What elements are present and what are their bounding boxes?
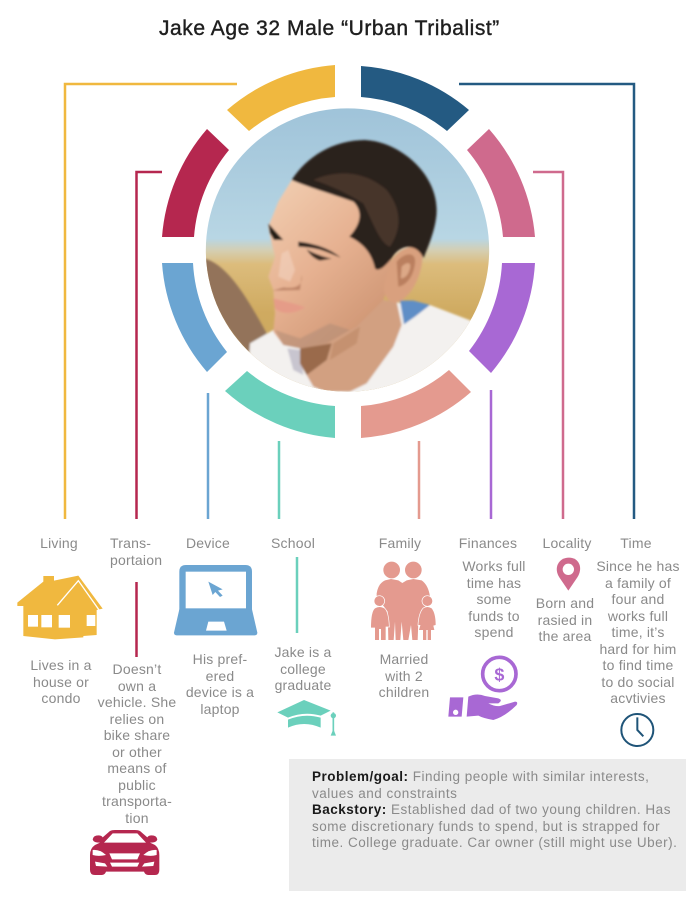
text: device: ered — [206, 668, 234, 684]
text: device: laptop — [200, 700, 240, 716]
text: transportation: tion — [125, 810, 149, 826]
text: time: to find time — [603, 657, 673, 673]
text: locality — [536, 595, 594, 644]
connector: family — [418, 441, 420, 519]
text: family — [379, 651, 429, 700]
text: transportation: own a — [118, 678, 156, 694]
text: time — [596, 558, 680, 706]
text: school: college — [280, 660, 326, 676]
ear — [384, 247, 422, 303]
nose highlight — [278, 250, 295, 282]
text: school: Jake is a — [274, 644, 332, 660]
connector: device — [207, 393, 209, 519]
eyebrow — [298, 242, 341, 258]
text: time: four and — [612, 591, 664, 607]
text: problem and backstory: time. College graduate. Car owner (still might use Uber). — [312, 835, 677, 850]
face — [268, 180, 392, 348]
heading: Transportation: Trans- — [110, 535, 151, 551]
segment: time — [361, 66, 469, 131]
hair highlights — [313, 173, 398, 247]
icons, right column — [557, 558, 653, 746]
shirt — [247, 300, 490, 397]
connector: school lower — [296, 557, 298, 633]
text: school: graduate — [275, 677, 331, 693]
text: device: His pref- — [193, 651, 247, 667]
lips — [273, 298, 305, 313]
icon: clock — [621, 714, 653, 746]
icon: location pin — [557, 558, 580, 591]
icon: car — [90, 830, 159, 875]
heading: School: School — [271, 535, 315, 551]
text: finances: spend — [474, 624, 514, 640]
icons, left half — [17, 565, 257, 639]
nose shadow — [274, 284, 302, 292]
text: problem and backstory — [312, 769, 677, 850]
connector: locality — [533, 172, 563, 519]
text: living: house or — [33, 674, 89, 690]
connector: transportation — [136, 172, 162, 519]
hair of woman at left — [203, 258, 267, 363]
text: problem and backstory: Problem/goal: Finding people with similar interests, — [312, 769, 649, 784]
shirt shadow — [287, 348, 303, 375]
text: living — [30, 657, 92, 706]
text: finances — [462, 558, 526, 640]
text: device: device is a — [186, 684, 254, 700]
title: Jake Age 32 Male “Urban Tribalist” — [159, 17, 500, 40]
text: transportation — [98, 661, 176, 826]
text: family: with 2 — [385, 668, 423, 684]
segment: transportation — [162, 129, 229, 237]
icon: house — [17, 576, 103, 639]
text: transportation: bike share — [104, 727, 170, 743]
text: transportation: public — [118, 776, 156, 792]
text: locality: the area — [539, 628, 591, 644]
text: family: Married — [380, 651, 428, 667]
text: time: time, it’s — [611, 624, 665, 640]
heading: Living: Living — [40, 535, 78, 551]
text: problem and backstory: some discretionary funds to spend, but is strapped for — [312, 818, 660, 834]
text: finances: some — [476, 591, 512, 607]
text: transportation: means of — [107, 760, 167, 776]
icon: laptop — [174, 565, 257, 635]
text: time: acvtivies — [610, 690, 666, 706]
text: time: Since he has — [596, 558, 680, 574]
text: problem and backstory: values and constraints — [312, 786, 457, 800]
text: finances: Works full — [462, 558, 526, 574]
neck — [300, 300, 402, 392]
heading: Locality: Locality — [542, 535, 592, 551]
icon: hand and dollar coin — [448, 657, 517, 720]
heading: Family: Family — [379, 535, 421, 551]
connector: school — [278, 441, 280, 519]
heading: Transportation: portaion — [110, 552, 162, 568]
text: school — [274, 644, 332, 693]
text: finances: time has — [467, 574, 521, 590]
text: transportation: relies on — [110, 710, 164, 726]
left eye lashes — [268, 223, 283, 240]
connector: transportation lower — [135, 582, 138, 657]
segment: living — [227, 65, 335, 131]
text: transportation: transporta- — [102, 793, 172, 809]
jaw stubble — [275, 323, 350, 348]
text: transportation: vehicle. She — [98, 694, 176, 710]
segment: locality — [467, 129, 535, 237]
text: device — [186, 651, 254, 717]
segment: device — [162, 263, 227, 372]
text: time: works full — [608, 608, 668, 624]
segment: finances — [469, 263, 535, 373]
neck shadow — [300, 343, 332, 375]
photo: portrait of Jake — [203, 107, 493, 397]
ring segments — [162, 65, 535, 438]
text: time: to do social — [601, 674, 675, 690]
text: living: Lives in a — [30, 657, 92, 673]
text: time: a family of — [605, 574, 671, 590]
panel: problem and backstory — [289, 759, 686, 891]
icon: hand and dollar coin: $ — [494, 664, 504, 684]
text: finances: funds to — [468, 608, 520, 624]
segment: family — [361, 370, 471, 438]
connector: finances — [490, 390, 492, 519]
text: living: condo — [41, 690, 81, 706]
icon: family — [371, 562, 436, 640]
heading: Time: Time — [620, 535, 652, 551]
hair — [292, 140, 437, 270]
shoulder stripe — [400, 301, 430, 324]
segment: school — [225, 371, 335, 438]
text: family: children — [379, 684, 429, 700]
connector: living — [65, 84, 237, 519]
text: transportation: Doesn’t — [113, 661, 161, 677]
text: transportation: or other — [112, 744, 162, 760]
right eye — [307, 249, 332, 261]
icon: graduation cap — [277, 700, 336, 736]
connector lines — [65, 84, 634, 657]
heading: Transportation — [110, 535, 162, 568]
heading: Device: Device — [186, 535, 230, 551]
text: problem and backstory: Backstory: Established dad of two young children. Has — [312, 802, 671, 817]
text: locality: Born and — [536, 595, 594, 611]
connector: time — [459, 84, 634, 519]
text: time: hard for him — [599, 640, 677, 656]
text: locality: rasied in — [538, 612, 592, 628]
heading: Finances: Finances — [459, 535, 517, 551]
